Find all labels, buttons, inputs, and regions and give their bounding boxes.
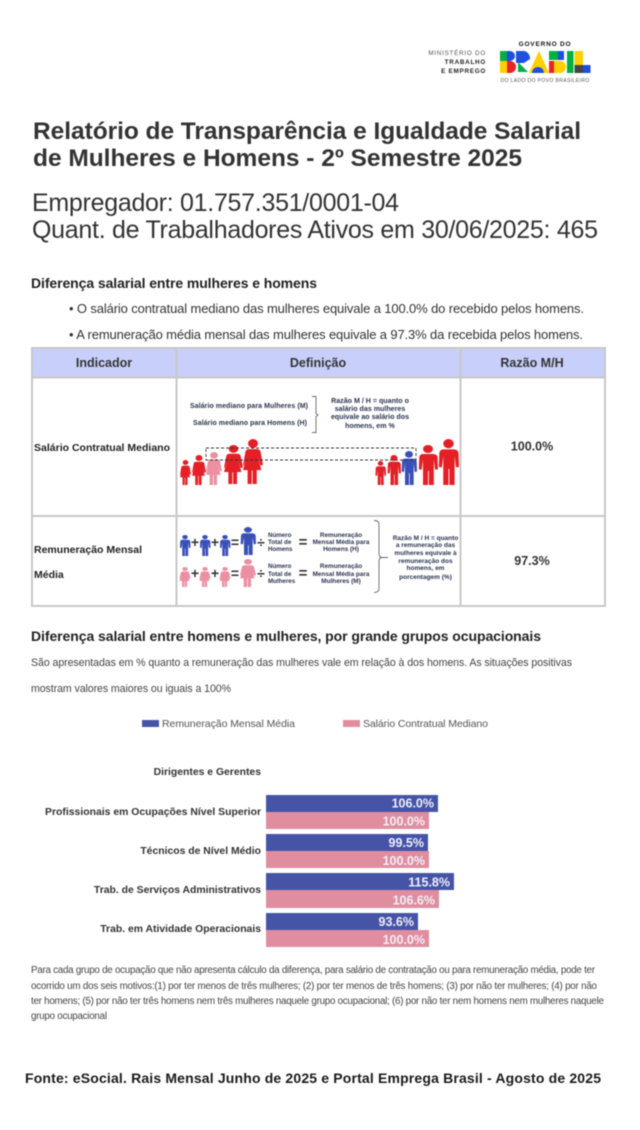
category labels: Profissionais em Ocupações Nível Superior xyxy=(45,807,261,818)
source: Fonte: eSocial. Rais Mensal Junho de 2025 e Portal Emprega Brasil - Agosto de 2025 xyxy=(25,1070,601,1086)
bar values: 99.5% xyxy=(389,836,424,850)
logo: Ministério do Trabalho e Emprego xyxy=(428,48,486,75)
title: de Mulheres e Homens - 2º Semestre 2025 xyxy=(33,145,522,172)
diagram: average pay: porcentagem (%) xyxy=(399,574,452,581)
category labels: Técnicos de Nível Médio xyxy=(140,846,261,857)
row 2 label: Média xyxy=(34,569,64,581)
footnote: ter homens; (5) por não ter três homens nem três mulheres naquele grupo ocupacional; (6) por não ter nem homens nem mulheres naquele xyxy=(31,996,605,1007)
diagram: median salary: Razão M / H = quanto o xyxy=(331,397,410,405)
icon: five men xyxy=(375,439,459,485)
heading: occupational groups: Diferença salarial entre homens e mulheres, por grande grupos ocupacionais xyxy=(31,628,541,644)
chart legend xyxy=(142,718,488,730)
diagram: average pay: Total de xyxy=(268,571,292,578)
chart legend: Remuneração Mensal Média xyxy=(162,718,295,730)
bar values: 93.6% xyxy=(379,915,414,929)
table header: Razão M/H xyxy=(500,356,564,370)
diagram: median salary: equivale ao salário dos xyxy=(331,413,409,421)
diagram: average pay: Mulheres xyxy=(268,578,296,585)
diagram: average pay: + xyxy=(211,534,219,550)
row 1 value: 100.0% xyxy=(511,440,553,454)
logo: Governo do Brasil xyxy=(500,41,590,84)
diagram: average pay: + xyxy=(211,565,219,581)
diagram: average pay: + xyxy=(191,565,199,581)
category labels: Dirigentes e Gerentes xyxy=(154,767,261,778)
logo: Ministério do Trabalho e Emprego: MINISTÉRIO DO xyxy=(428,48,486,57)
bar values: 106.0% xyxy=(392,796,434,810)
logo: Governo do Brasil: DO LADO DO POVO BRASILEIRO xyxy=(500,78,590,84)
diagram: average pay: ÷ xyxy=(257,534,265,550)
chart legend: Salário Contratual Mediano xyxy=(363,718,488,730)
diagram: average pay: mulheres equivale à xyxy=(394,550,457,557)
diagram: median salary xyxy=(180,396,459,485)
diagram: average pay: Remuneração xyxy=(320,532,362,539)
table header xyxy=(32,348,605,377)
row 2 label xyxy=(34,544,142,581)
icon row: men xyxy=(180,527,256,556)
bars: Salário Contratual Mediano xyxy=(266,812,439,947)
diagram: average pay: = xyxy=(231,534,239,550)
diagram: average pay: + xyxy=(191,534,199,550)
category labels xyxy=(45,767,261,935)
diagram: average pay: ÷ xyxy=(257,565,265,581)
employer information: Empregador: 01.757.351/0001-04 xyxy=(32,189,399,217)
logo: Ministério do Trabalho e Emprego: TRABALHO xyxy=(445,59,486,66)
summary bullets: • A remuneração média mensal das mulheres equivale a 97.3% da recebida pelos homens. xyxy=(69,327,583,342)
diagram: median salary: salário das mulheres xyxy=(335,405,405,413)
diagram: average pay: Mulheres (M) xyxy=(321,578,361,585)
row 2 value: 97.3% xyxy=(514,554,550,568)
bars: Remuneração Mensal Média xyxy=(266,795,454,930)
diagram: average pay: Homens xyxy=(268,546,293,553)
footnote: Para cada grupo de ocupação que não apresenta cálculo da diferença, para salário de contratação ou para remuneração média, pode ter xyxy=(31,965,596,976)
diagram: average pay: remuneração dos xyxy=(398,558,453,565)
diagram: average pay: Total de xyxy=(268,539,292,546)
description paragraph: São apresentadas em % quanto a remuneração das mulheres vale em relação à dos homens. As situações positivas xyxy=(31,657,572,669)
diagram: average pay: Razão M / H = quanto xyxy=(393,535,458,542)
bar chart xyxy=(45,767,454,947)
heading: salary difference: Diferença salarial entre mulheres e homens xyxy=(31,275,317,291)
diagram: average pay: a remuneração das xyxy=(396,542,456,549)
employer information xyxy=(32,189,598,244)
bar values: 106.6% xyxy=(393,894,435,908)
diagram: average pay: Mensal Média para xyxy=(313,539,370,546)
row 2 label: Remuneração Mensal xyxy=(34,544,142,556)
diagram: average pay: Número xyxy=(268,563,292,570)
table header: Indicador xyxy=(76,356,132,370)
indicator table xyxy=(32,348,605,606)
title: Relatório de Transparência e Igualdade Salarial xyxy=(33,118,581,145)
category labels: Trab. em Atividade Operacionais xyxy=(100,924,261,935)
diagram: median salary: Salário mediano para Mulheres (M) xyxy=(190,403,308,410)
row 1 label: Salário Contratual Mediano xyxy=(34,442,170,454)
diagram: average pay: homens, em xyxy=(407,565,445,572)
diagram: average pay: = xyxy=(231,565,239,581)
title xyxy=(33,118,581,172)
diagram: average pay: Remuneração xyxy=(320,563,362,570)
bar values: 115.8% xyxy=(408,876,450,890)
diagram: average pay: Mensal Média para xyxy=(313,571,370,578)
diagram: average pay: Homens (H) xyxy=(323,546,359,553)
diagram: average pay: Número xyxy=(268,532,292,539)
diagram: average pay: = xyxy=(299,565,308,582)
logo: Ministério do Trabalho e Emprego: E EMPREGO xyxy=(441,68,486,75)
diagram: median salary: Salário mediano para Homens (H) xyxy=(193,420,307,427)
table header: Definição xyxy=(290,356,346,370)
bar values: 100.0% xyxy=(383,933,425,947)
footnote: grupo ocupacional xyxy=(31,1011,107,1022)
description paragraph xyxy=(31,657,572,695)
summary bullets xyxy=(69,301,584,342)
diagram: average pay xyxy=(180,520,458,592)
footnote: ocorrido um dos seis motivos:(1) por ter menos de três mulheres; (2) por ter menos de três homens; (3) por não ter mulheres; (4) por não xyxy=(31,981,598,992)
diagram: median salary: homens, em % xyxy=(345,422,396,430)
bar values: 100.0% xyxy=(383,814,425,828)
icon row: women xyxy=(180,559,256,587)
bar values: 100.0% xyxy=(383,854,425,868)
employer information: Quant. de Trabalhadores Ativos em 30/06/2025: 465 xyxy=(32,216,598,244)
category labels: Trab. de Serviços Administrativos xyxy=(94,885,261,896)
summary bullets: • O salário contratual mediano das mulheres equivale a 100.0% do recebido pelos homens. xyxy=(69,301,584,316)
logo: Governo do Brasil: GOVERNO DO xyxy=(519,41,571,48)
diagram: average pay: = xyxy=(299,534,308,551)
footnote xyxy=(31,965,605,1022)
bar values xyxy=(379,796,450,947)
description paragraph: mostram valores maiores ou iguais a 100% xyxy=(31,683,232,695)
icon: five women xyxy=(180,439,263,485)
